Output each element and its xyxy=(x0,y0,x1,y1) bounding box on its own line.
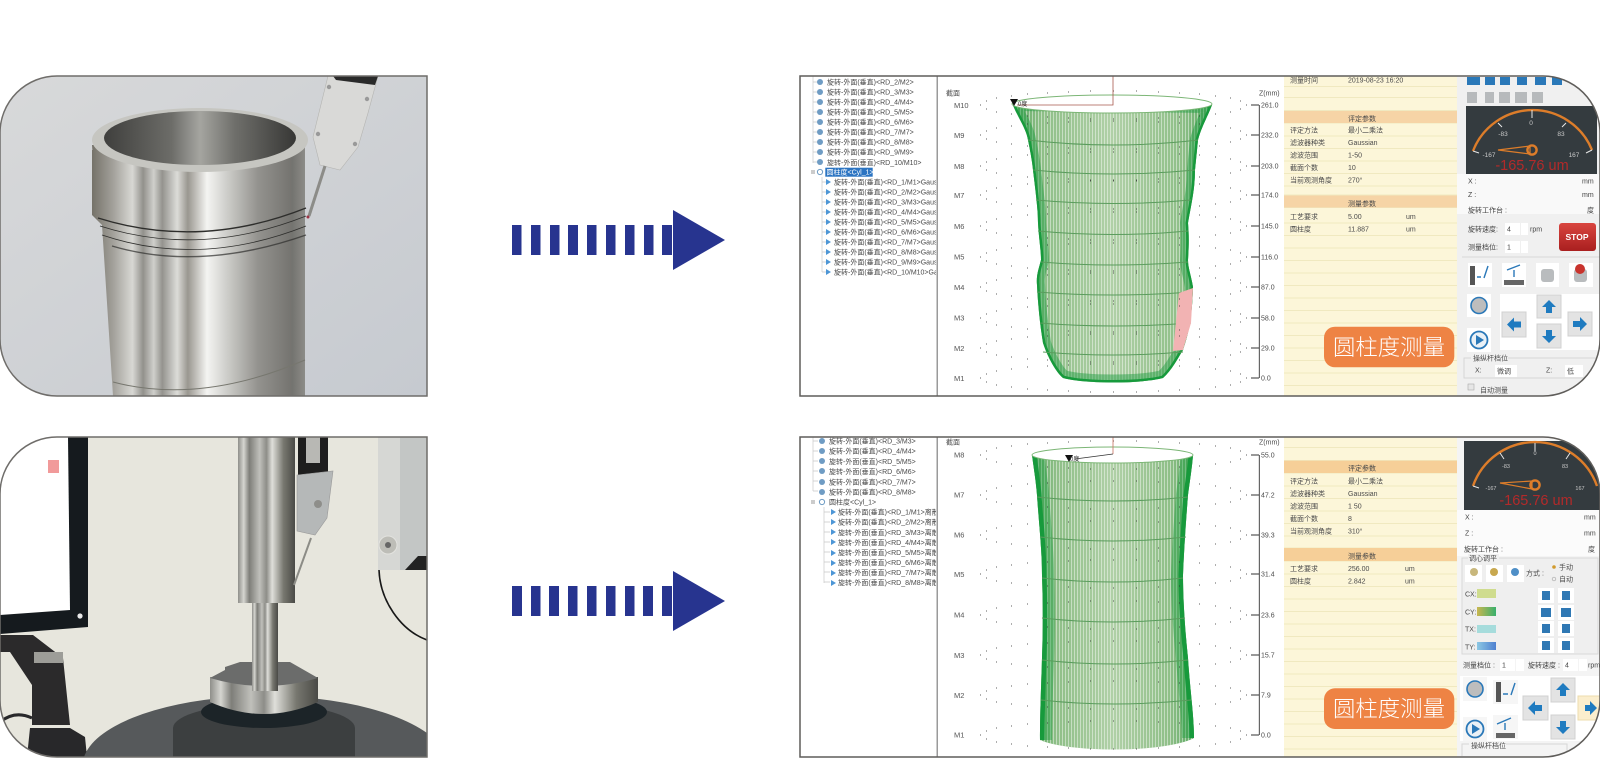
joystick gear group: 低 xyxy=(1567,366,1574,376)
tree panel 1: 旋转-外面(垂直)<RD_5/M5> xyxy=(827,108,914,116)
gauge: 83 xyxy=(1562,464,1568,470)
tree panel 2: 旋转-外面(垂直)<RD_7/M7> xyxy=(829,478,916,486)
parameter table 1: 工艺要求 xyxy=(1290,212,1318,221)
chart 1: section labels: M2 xyxy=(954,344,964,353)
centering and leveling group: CY: xyxy=(1465,610,1476,616)
liner grooves xyxy=(98,208,306,390)
tree panel 2 xyxy=(811,436,939,587)
chart 1: z axis: 0.0 xyxy=(1261,376,1271,382)
toolbar icons xyxy=(1467,77,1562,103)
chart 1: section labels: 截面 xyxy=(946,88,960,98)
parameter table 2: 工艺要求 xyxy=(1290,564,1318,573)
right arm unit xyxy=(378,437,427,640)
tree panel 1: 旋转-外面(垂直)<RD_4/M4> xyxy=(827,98,914,106)
table ring xyxy=(173,710,355,756)
gauge: -83 xyxy=(1498,131,1508,138)
speed and gear inputs xyxy=(1468,223,1542,253)
tree panel 1: 旋转-外面(垂直)<RD_2/M2>Gaussian xyxy=(834,188,950,196)
centering and leveling group: 手动 xyxy=(1559,562,1573,572)
tree panel 2: 旋转-外面(垂直)<RD_1/M1>离散 xyxy=(838,508,939,516)
chart 1: z axis: 87.0 xyxy=(1261,284,1275,292)
arrow 1 xyxy=(512,210,725,270)
chart 1: section labels: M9 xyxy=(954,131,964,140)
readouts: mm xyxy=(1582,192,1594,199)
gauge: 167 xyxy=(1569,152,1580,159)
orange label 2: 圆柱度测量 xyxy=(1333,696,1445,722)
liner top section xyxy=(92,145,305,150)
parameter table 1: 当前观测角度 xyxy=(1290,176,1332,184)
gauge: -83 xyxy=(1502,464,1510,470)
stop button: STOP xyxy=(1566,232,1589,242)
control panel 1 xyxy=(1457,76,1600,396)
tree panel 1: 旋转-外面(垂直)<RD_9/M9>Gaussian xyxy=(834,258,950,266)
chart 2: section labels: M2 xyxy=(954,691,964,700)
readouts: 度 xyxy=(1588,544,1595,554)
gear and speed inputs: 4 xyxy=(1565,662,1569,670)
centering and leveling group: 自动 xyxy=(1559,574,1573,584)
tree panel 1: 旋转-外面(垂直)<RD_9/M9> xyxy=(827,148,914,156)
parameter table 2: Gaussian xyxy=(1348,491,1378,498)
out-of-tolerance patch xyxy=(1173,288,1193,351)
tree panel 1: 旋转-外面(垂直)<RD_8/M8>Gaussian xyxy=(834,248,950,256)
tree panel 1: 旋转-外面(垂直)<RD_2/M2> xyxy=(827,78,914,86)
centering and leveling group: TY: xyxy=(1465,644,1476,652)
parameter table 1: 10 xyxy=(1348,165,1356,172)
chart 2: section labels: M7 xyxy=(954,490,964,500)
readouts: Z : xyxy=(1468,192,1476,199)
chart 2: zero marker: 0度 xyxy=(1070,455,1079,463)
tree panel 2: 旋转-外面(垂直)<RD_4/M4>离散 xyxy=(838,538,939,547)
stop button xyxy=(1559,223,1596,251)
joystick gear group: 操纵杆档位 xyxy=(1473,354,1508,362)
speed and gear inputs: 旋转速度: xyxy=(1468,224,1498,234)
liner bore xyxy=(104,111,296,165)
orange label 2 xyxy=(1324,688,1454,729)
chart 2: section labels xyxy=(946,438,964,740)
parameter table 2: 1 50 xyxy=(1348,504,1362,510)
chart 2: z axis: 39.3 xyxy=(1261,532,1275,540)
chart 1: zero marker: 0度 xyxy=(1018,100,1027,108)
chart 1: section labels: M1 xyxy=(954,374,964,383)
joystick gear group: 微调 xyxy=(1497,366,1511,376)
parameter table 2: 评定方法 xyxy=(1290,476,1318,486)
photo: cylinder liner with probe xyxy=(0,76,427,396)
spindle column xyxy=(238,437,295,603)
tree panel 1: 旋转-外面(垂直)<RD_6/M6> xyxy=(827,118,914,126)
tree panel 2: 旋转-外面(垂直)<RD_7/M7>离散 xyxy=(838,568,939,577)
tree panel 1: 旋转-外面(垂直)<RD_6/M6>Gaussian xyxy=(834,228,950,236)
chart 2: cylinder mesh xyxy=(1032,447,1194,750)
cylinder liner body xyxy=(92,150,305,396)
tree panel 1: 圆柱度<Cyl_1> xyxy=(826,168,874,177)
parameter table 2: 圆柱度 xyxy=(1290,576,1311,586)
tree panel 1: 旋转-外面(垂直)<RD_3/M3> xyxy=(827,88,914,96)
auto measure checkbox: 自动测量 xyxy=(1480,386,1508,394)
speed and gear inputs: 4 xyxy=(1507,226,1511,234)
rotary table xyxy=(84,696,427,757)
readouts: 度 xyxy=(1587,206,1594,214)
chart 1: z axis: 174.0 xyxy=(1261,192,1279,200)
parameter table 1: 圆柱度 xyxy=(1290,224,1311,234)
gear and speed inputs: 测量档位 : xyxy=(1463,660,1495,670)
photo frame 2 xyxy=(0,437,427,757)
parameter table 2: 8 xyxy=(1348,516,1352,523)
chart 2: z axis: 0.0 xyxy=(1261,732,1271,740)
monitor xyxy=(0,437,88,634)
parameter table 1: Gaussian xyxy=(1348,140,1378,147)
tree panel 1: 旋转-外面(垂直)<RD_7/M7> xyxy=(827,128,914,136)
orange label 1: 圆柱度测量 xyxy=(1333,335,1445,360)
parameter table 1: 1-50 xyxy=(1348,152,1362,160)
chart 2: section labels: M5 xyxy=(954,570,964,579)
gear and speed inputs xyxy=(1463,659,1600,671)
chart 2: z axis: 31.4 xyxy=(1261,572,1275,578)
joystick gear group: Z: xyxy=(1546,368,1552,374)
tree panel 1: 旋转-外面(垂直)<RD_10/M10> xyxy=(827,158,922,167)
chart 2: section labels: 截面 xyxy=(946,438,960,446)
chart 1: section labels: M8 xyxy=(954,162,964,171)
tree panel 2: 旋转-外面(垂直)<RD_4/M4> xyxy=(829,446,916,456)
parameter table 1: 最小二乘法 xyxy=(1348,126,1383,134)
gauge: -165.76 um xyxy=(1495,158,1569,174)
parameter table 1: um xyxy=(1406,226,1416,234)
chuck base xyxy=(201,703,327,728)
readouts: X : xyxy=(1465,514,1474,522)
jog pad xyxy=(1460,676,1600,741)
chart 2: z axis: 7.9 xyxy=(1261,692,1271,700)
tree panel 2: 旋转-外面(垂直)<RD_8/M8> xyxy=(829,488,916,496)
chart 2: dot rings xyxy=(980,441,1247,749)
photo: shaft on rotary table xyxy=(0,437,427,757)
parameter table 1: 滤波器种类 xyxy=(1290,138,1325,147)
speed and gear inputs: rpm xyxy=(1530,226,1542,234)
chart 1: section labels: M6 xyxy=(954,222,964,231)
tool buttons xyxy=(1468,263,1593,287)
software screenshot 2 xyxy=(800,436,1600,757)
chart 2: section labels: M4 xyxy=(954,610,964,620)
parameter table 1: 评定方法 xyxy=(1290,126,1318,134)
readouts: mm xyxy=(1584,530,1596,538)
chart 2: section labels: M6 xyxy=(954,530,964,540)
probe xyxy=(306,76,378,218)
parameter table 2: 滤波器种类 xyxy=(1290,489,1325,498)
chart 2: section labels: M1 xyxy=(954,730,964,740)
chart 2: zero marker xyxy=(1065,437,1113,463)
parameter table 2: 最小二乘法 xyxy=(1348,476,1383,486)
chart 1: z axis: 232.0 xyxy=(1261,132,1279,140)
chart 1: z axis: 29.0 xyxy=(1261,346,1275,352)
parameter table 1: 5.00 xyxy=(1348,214,1362,221)
shaft xyxy=(252,603,278,691)
joystick gear group: X: xyxy=(1475,368,1482,374)
readouts xyxy=(1457,510,1600,556)
parameter table 1: 测量参数 xyxy=(1348,199,1376,208)
readouts: Z : xyxy=(1465,530,1473,538)
chart 1: dot rings xyxy=(980,91,1247,392)
tree panel 2: 旋转-外面(垂直)<RD_3/M3>离散 xyxy=(838,528,939,537)
chart 1: z axis: 203.0 xyxy=(1261,164,1279,170)
tree panel 2: 旋转-外面(垂直)<RD_5/M5> xyxy=(829,457,916,466)
screenshot frame 1 xyxy=(800,76,1600,396)
parameter table 1: 评定参数 xyxy=(1348,114,1376,123)
tree panel 1: 旋转-外面(垂直)<RD_7/M7>Gaussian xyxy=(834,238,950,246)
parameter table 2: um xyxy=(1405,566,1415,573)
parameter table 1: 截面个数 xyxy=(1290,163,1318,172)
gauge: -165.76 um xyxy=(1499,493,1573,509)
centering and leveling group: TX: xyxy=(1465,626,1476,634)
chuck disc xyxy=(210,677,318,714)
chart 2: section labels: M3 xyxy=(954,651,964,660)
chart 1: z axis: 261.0 xyxy=(1261,102,1279,110)
centering and leveling group xyxy=(1462,554,1598,654)
tree panel 2: 旋转-外面(垂直)<RD_5/M5>离散 xyxy=(838,548,939,557)
speed and gear inputs: 1 xyxy=(1507,244,1511,252)
orange label 1 xyxy=(1324,327,1454,367)
readouts xyxy=(1457,174,1600,214)
parameter table 1: 滤波范围 xyxy=(1290,150,1318,160)
readouts: mm xyxy=(1582,178,1594,186)
parameter table 2: 310° xyxy=(1348,528,1363,536)
gauge: 0 xyxy=(1529,120,1533,127)
tree panel 2: 旋转-外面(垂直)<RD_8/M8>离散 xyxy=(838,578,939,587)
parameter table 1: 270° xyxy=(1348,176,1363,184)
arrow 2 xyxy=(512,571,725,631)
parameter table 1 xyxy=(1284,76,1457,396)
chart 1: section labels: M4 xyxy=(954,283,964,292)
tree panel 2: 旋转-外面(垂直)<RD_2/M2>离散 xyxy=(838,518,939,526)
parameter table 2: 滤波范围 xyxy=(1290,502,1318,510)
readouts: 旋转工作台 : xyxy=(1468,206,1507,214)
tree panel 1: 旋转-外面(垂直)<RD_8/M8> xyxy=(827,138,914,146)
photo frame 1 xyxy=(0,76,427,396)
centering and leveling group: CX: xyxy=(1465,592,1477,598)
readouts: 旋转工作台 : xyxy=(1464,544,1503,554)
tree panel 2: 圆柱度<Cyl_1> xyxy=(829,498,876,506)
parameter table 2: 评定参数 xyxy=(1348,464,1376,472)
joystick gear group xyxy=(1462,741,1567,756)
control panel 2 xyxy=(1457,437,1600,757)
chart 1: z axis: Z(mm) xyxy=(1259,90,1280,98)
joystick gear group xyxy=(1464,354,1596,378)
gauge: 0 xyxy=(1533,451,1537,457)
readouts: mm xyxy=(1584,514,1596,522)
parameter table 2: 测量参数 xyxy=(1348,552,1376,560)
chart 1: section labels: M5 xyxy=(954,252,964,262)
chuck jaws xyxy=(210,662,318,686)
chart 1: cylinder mesh xyxy=(1012,95,1212,382)
chart 1: zero marker xyxy=(1010,76,1113,108)
chart 2: z axis: 47.2 xyxy=(1261,492,1275,500)
parameter table 2: 截面个数 xyxy=(1290,514,1318,523)
speed and gear inputs: 测量档位: xyxy=(1468,242,1498,252)
parameter table 1: 11.887 xyxy=(1348,226,1369,234)
gauge xyxy=(1466,106,1597,174)
tree panel 1: 旋转-外面(垂直)<RD_3/M3>Gaussian xyxy=(834,198,950,206)
chart 1: z axis xyxy=(1251,90,1280,382)
chart 2: z axis xyxy=(1251,440,1280,740)
gauge: 167 xyxy=(1575,486,1585,492)
tree panel 1: 旋转-外面(垂直)<RD_5/M5>Gaussian xyxy=(834,218,950,226)
jog pad xyxy=(1467,294,1600,352)
chart 2: z axis: 15.7 xyxy=(1261,652,1275,660)
parameter table 2: 256.00 xyxy=(1348,566,1370,573)
tree panel 2: 旋转-外面(垂直)<RD_6/M6> xyxy=(829,467,916,476)
gauge xyxy=(1464,441,1600,510)
chart 1: section labels: M7 xyxy=(954,191,964,200)
parameter table 1: 2019-08-23 16:20 xyxy=(1348,78,1403,84)
tree panel 1: 旋转-外面(垂直)<RD_1/M1>Gaussian xyxy=(834,178,950,186)
probe xyxy=(294,437,333,585)
chart 2: z axis: 23.6 xyxy=(1261,612,1275,620)
chart 1: z axis: 58.0 xyxy=(1261,316,1275,322)
readouts: X : xyxy=(1468,178,1477,186)
parameter table 2: um xyxy=(1405,578,1415,586)
tree panel 2: 旋转-外面(垂直)<RD_3/M3> xyxy=(829,436,916,446)
centering and leveling group: 方式 : xyxy=(1526,568,1544,578)
parameter table 2: 2.842 xyxy=(1348,578,1366,586)
screenshot frame 2 xyxy=(800,437,1600,757)
chart 1: z axis: 116.0 xyxy=(1261,254,1278,262)
chart 1: z axis: 145.0 xyxy=(1261,224,1279,230)
liner rim xyxy=(92,108,308,172)
chart 2: z axis: 55.0 xyxy=(1261,452,1275,460)
gauge: -167 xyxy=(1485,486,1497,492)
auto measure checkbox xyxy=(1468,384,1508,394)
monitor arm xyxy=(0,635,87,757)
chart 1: section labels: M10 xyxy=(954,101,969,110)
gauge: 83 xyxy=(1557,131,1565,138)
gauge: -167 xyxy=(1482,152,1496,159)
parameter table 2 xyxy=(1284,437,1457,757)
chart 2: z axis: Z(mm) xyxy=(1259,440,1280,446)
centering and leveling group: 调心调平 xyxy=(1469,554,1497,562)
gear and speed inputs: rpm xyxy=(1588,662,1600,670)
gear and speed inputs: 1 xyxy=(1502,662,1506,670)
software screenshot 1 xyxy=(800,76,1600,396)
tree panel 1: 旋转-外面(垂直)<RD_10/M10>Gaussian xyxy=(834,268,958,276)
tree panel 2: 旋转-外面(垂直)<RD_6/M6>离散 xyxy=(838,558,939,567)
tree panel 1 xyxy=(811,76,936,276)
parameter table 1: 测量时间 xyxy=(1290,76,1318,84)
parameter table 1: um xyxy=(1406,214,1416,221)
chart 1: section labels: M3 xyxy=(954,314,964,322)
chart 2: section labels: M8 xyxy=(954,450,964,460)
chart 1: section labels xyxy=(946,88,969,383)
tree panel 1: 旋转-外面(垂直)<RD_4/M4>Gaussian xyxy=(834,208,950,216)
parameter table 2: 当前观测角度 xyxy=(1290,526,1332,536)
joystick gear group: 操纵杆档位 xyxy=(1471,741,1506,750)
gear and speed inputs: 旋转速度 : xyxy=(1528,660,1560,670)
